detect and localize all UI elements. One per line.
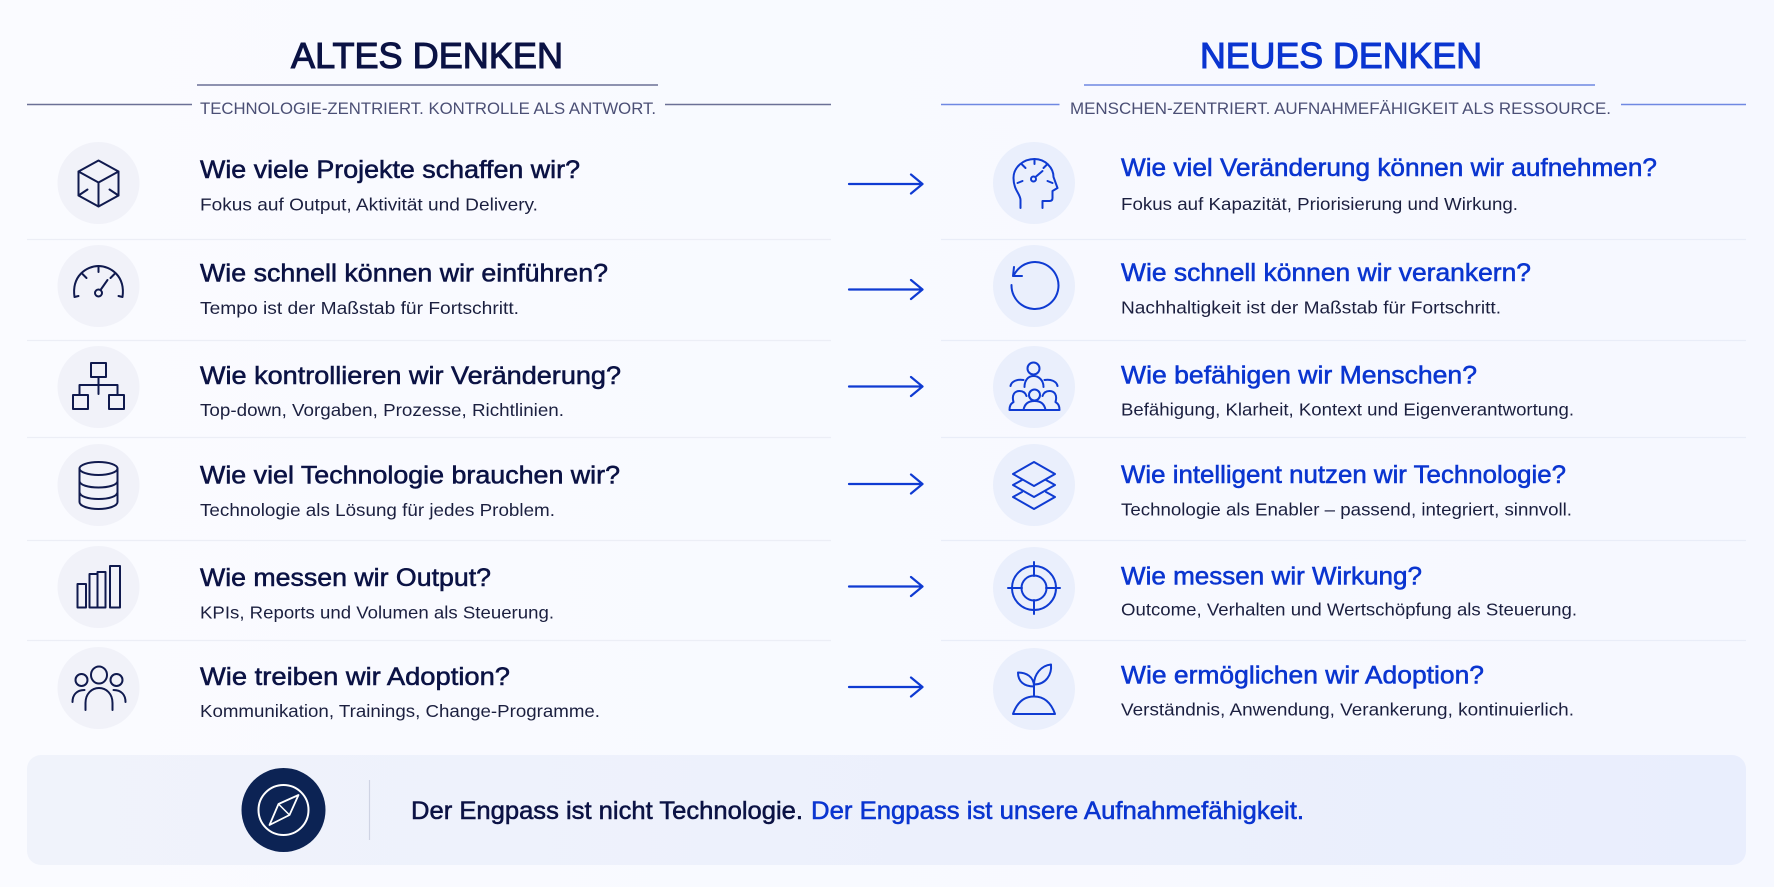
heading: altes denken: ALTES DENKEN xyxy=(291,35,563,76)
arrow 2 xyxy=(849,280,922,299)
icon: team xyxy=(1010,362,1060,410)
row: wirkung xyxy=(993,547,1577,629)
description: Technologie als Enabler – passend, integriert, sinnvoll. xyxy=(1121,500,1572,520)
subtitle: neues denken: MENSCHEN-ZENTRIERT. AUFNAHMEFÄHIGKEIT ALS RESSOURCE. xyxy=(1070,100,1611,118)
arrow 1 xyxy=(849,174,922,194)
icon: database xyxy=(80,462,118,509)
row: technologie xyxy=(58,444,620,526)
statement: new: Der Engpass ist unsere Aufnahmefähigkeit. xyxy=(811,797,1304,825)
row: adoption xyxy=(58,647,600,729)
arrow 3 xyxy=(849,377,922,396)
question: Wie treiben wir Adoption? xyxy=(200,663,510,691)
arrow 4 xyxy=(849,474,922,494)
question: Wie schnell können wir verankern? xyxy=(1121,259,1531,287)
callout: bottom banner xyxy=(27,755,1746,865)
description: Fokus auf Kapazität, Priorisierung und Wirkung. xyxy=(1121,194,1518,214)
question: Wie kontrollieren wir Veränderung? xyxy=(200,362,621,390)
icon: cycle xyxy=(1011,262,1058,309)
question: Wie messen wir Wirkung? xyxy=(1121,562,1422,590)
description: Verständnis, Anwendung, Verankerung, kontinuierlich. xyxy=(1121,700,1574,720)
icon: cube xyxy=(78,160,118,206)
row: output xyxy=(58,546,554,628)
question: Wie schnell können wir einführen? xyxy=(200,260,608,288)
description: Tempo ist der Maßstab für Fortschritt. xyxy=(200,298,519,318)
row: kontrolle xyxy=(58,346,621,428)
row: befähigung xyxy=(993,346,1574,428)
row: tempo xyxy=(58,245,608,327)
icon: head with gauge xyxy=(1014,159,1058,208)
subtitle: altes denken: TECHNOLOGIE-ZENTRIERT. KONTROLLE ALS ANTWORT. xyxy=(200,100,656,118)
question: Wie viel Veränderung können wir aufnehmen? xyxy=(1121,154,1657,182)
question: Wie befähigen wir Menschen? xyxy=(1121,362,1477,390)
arrow 5 xyxy=(849,577,922,596)
icon: compass xyxy=(242,768,326,852)
description: Nachhaltigkeit ist der Maßstab für Fortschritt. xyxy=(1121,298,1501,318)
row: ermöglichen xyxy=(993,648,1574,730)
panel: neues denken xyxy=(941,35,1746,730)
row: kapazität xyxy=(993,142,1657,224)
question: Wie viele Projekte schaffen wir? xyxy=(200,156,580,184)
icon: gauge xyxy=(74,266,123,297)
description: Outcome, Verhalten und Wertschöpfung als Steuerung. xyxy=(1121,600,1577,620)
description: Top-down, Vorgaben, Prozesse, Richtlinien. xyxy=(200,400,564,420)
icon: bar chart xyxy=(78,566,120,608)
question: Wie messen wir Output? xyxy=(200,564,491,592)
icon: org chart xyxy=(73,363,124,409)
row: projekte xyxy=(58,142,580,224)
description: Kommunikation, Trainings, Change-Programme. xyxy=(200,701,600,721)
icon: layers xyxy=(1013,462,1055,509)
row: nachhaltigkeit xyxy=(993,245,1531,327)
question: Wie ermöglichen wir Adoption? xyxy=(1121,662,1484,690)
description: Technologie als Lösung für jedes Problem. xyxy=(200,500,555,520)
icon: target xyxy=(1008,562,1060,614)
question: Wie intelligent nutzen wir Technologie? xyxy=(1121,461,1566,489)
description: Befähigung, Klarheit, Kontext und Eigenverantwortung. xyxy=(1121,400,1574,420)
icon: sprout xyxy=(1013,664,1055,714)
icon: people xyxy=(72,666,126,710)
arrow 6 xyxy=(849,678,922,696)
panel: altes denken xyxy=(27,35,831,729)
row: intelligente technologie xyxy=(993,444,1572,526)
question: Wie viel Technologie brauchen wir? xyxy=(200,462,620,490)
statement: old: Der Engpass ist nicht Technologie. xyxy=(411,797,803,825)
heading: neues denken: NEUES DENKEN xyxy=(1200,35,1482,76)
description: KPIs, Reports und Volumen als Steuerung. xyxy=(200,602,554,622)
description: Fokus auf Output, Aktivität und Delivery. xyxy=(200,194,538,214)
